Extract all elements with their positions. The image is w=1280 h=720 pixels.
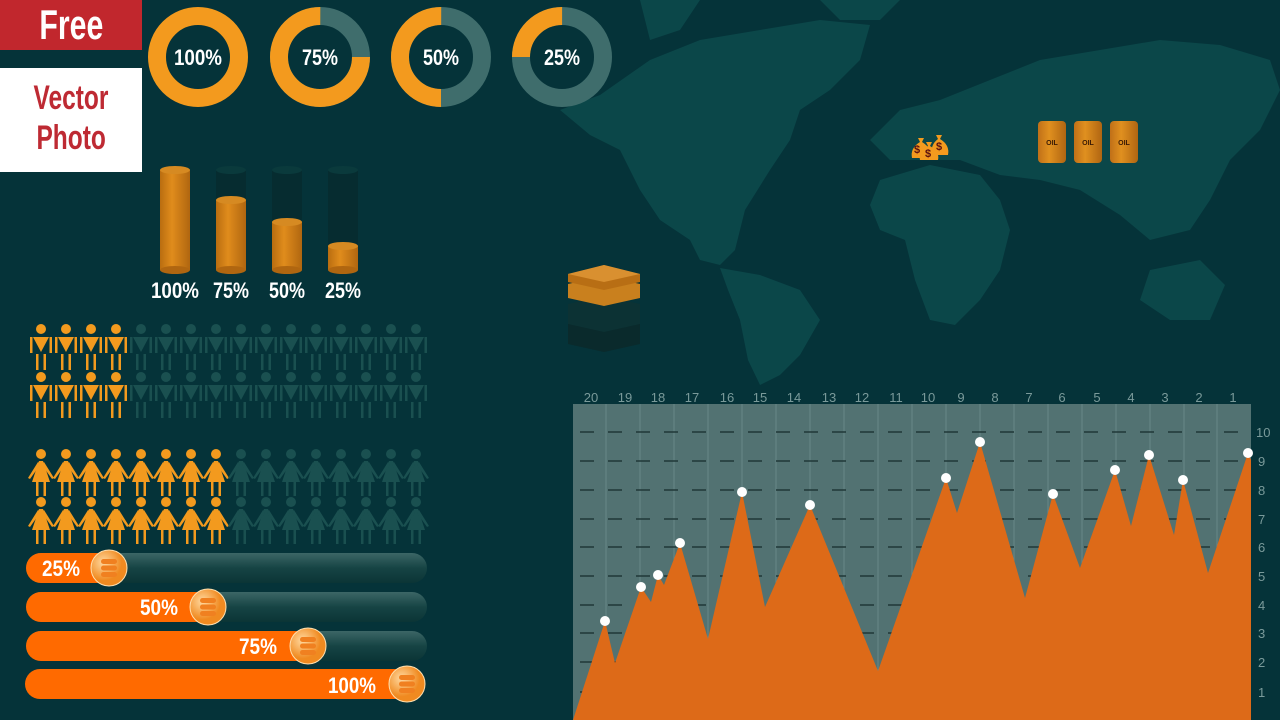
x-axis labels: 1 [1229,390,1237,405]
y-axis labels: 7 [1258,512,1265,527]
cylinder labels: 100% [151,278,199,303]
y-axis labels [1256,425,1270,700]
donut 100% [157,16,239,98]
x-axis labels: 5 [1093,390,1101,405]
x-axis labels: 13 [822,390,836,405]
badge: Free: Free [39,1,103,48]
x-axis labels: 16 [720,390,734,405]
cylinder 75% [216,166,246,274]
y-axis labels: 5 [1258,569,1265,584]
x-axis labels: 17 [685,390,699,405]
cylinder labels: 75% [213,278,249,303]
cylinder labels: 50% [269,278,305,303]
donut charts [148,7,612,107]
icon: oil barrels: OIL [1082,140,1095,147]
badge: Vector Photo [0,68,142,172]
bar 25% [26,550,427,586]
icon: money bags [912,135,948,160]
donut 25% [521,16,603,98]
badge: Vector Photo: Photo [36,119,106,157]
icon: money bags: $ [925,148,931,160]
icon: oil barrels: OIL [1118,140,1131,147]
bar 75%: 75% [239,634,277,659]
x-axis labels [584,390,1237,405]
x-axis labels: 18 [651,390,665,405]
bar 50%: 50% [140,595,178,620]
donut 25%: 25% [544,45,580,70]
donut 75%: 75% [302,45,338,70]
badge: Free [0,0,142,50]
x-axis labels: 12 [855,390,869,405]
icon: oil barrels: OIL [1046,140,1059,147]
x-axis labels: 11 [889,390,903,405]
donut 75% [279,16,361,98]
x-axis labels: 9 [957,390,965,405]
bar 50% [26,589,427,625]
cylinder 50% [272,166,302,274]
cylinder labels [151,278,361,303]
pictogram: men and women [28,324,429,544]
y-axis labels: 2 [1258,655,1265,670]
x-axis labels: 4 [1127,390,1135,405]
y-axis labels: 1 [1258,685,1265,700]
bar 100% [25,666,425,702]
y-axis labels: 9 [1258,454,1265,469]
cylinder bars [151,166,361,303]
icon: oil barrels [1038,121,1138,163]
icon: money bags: $ [936,141,942,153]
x-axis labels: 2 [1195,390,1203,405]
cylinder labels: 25% [325,278,361,303]
progress bars [25,550,427,702]
y-axis labels: 4 [1258,598,1265,613]
cylinder 100% [160,166,190,274]
icon: stacked layers [568,265,640,352]
y-axis labels: 8 [1258,483,1265,498]
bar 25%: 25% [42,556,80,581]
donut 100%: 100% [174,45,222,70]
donut 50%: 50% [423,45,459,70]
y-axis labels: 6 [1258,540,1265,555]
x-axis labels: 19 [618,390,632,405]
x-axis labels: 3 [1161,390,1169,405]
x-axis labels: 20 [584,390,598,405]
x-axis labels: 8 [991,390,999,405]
cylinder 25% [328,166,358,274]
x-axis labels: 15 [753,390,767,405]
badge: Vector Photo: Vector [34,79,108,117]
bar 100%: 100% [328,673,376,698]
y-axis labels: 3 [1258,626,1265,641]
bar 75% [26,628,427,664]
x-axis labels: 6 [1058,390,1066,405]
donut 50% [400,16,482,98]
y-axis labels: 10 [1256,425,1270,440]
x-axis labels: 7 [1025,390,1033,405]
x-axis labels: 10 [921,390,935,405]
icon: money bags: $ [914,144,920,156]
x-axis labels: 14 [787,390,801,405]
area chart [573,390,1270,720]
